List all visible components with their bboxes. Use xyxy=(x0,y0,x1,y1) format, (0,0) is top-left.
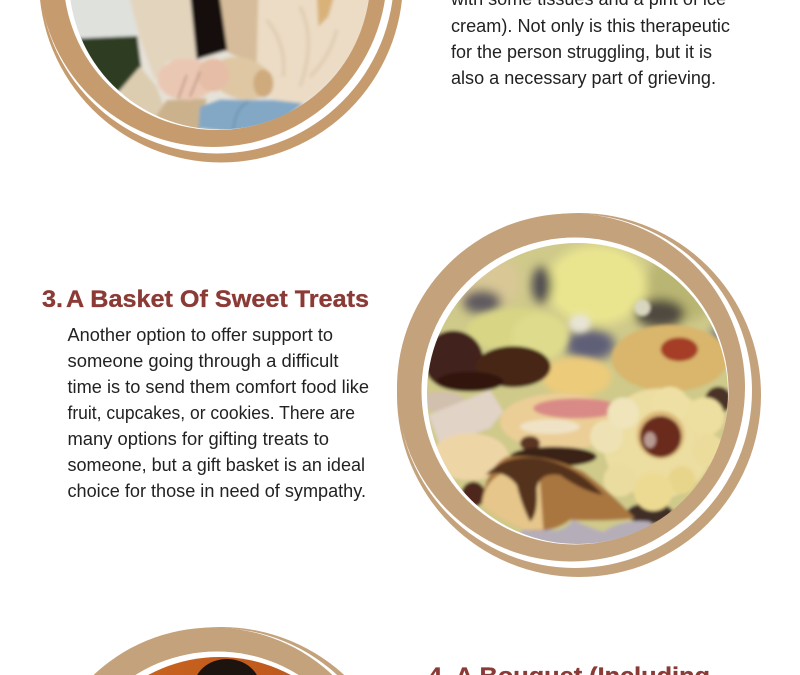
inner white rim xyxy=(64,0,370,130)
text block: section 3 description: time is to send them comfort food like xyxy=(68,377,369,397)
outer crescent ring xyxy=(39,627,403,675)
text block: section 3 description: someone going through a difficult xyxy=(68,351,338,371)
text block: section 2 closing lines: also a necessary part of grieving. xyxy=(451,68,716,88)
text block: section 2 closing lines: cream). Not only is this therapeutic xyxy=(451,16,730,36)
plate edge xyxy=(520,518,654,544)
inner white rim xyxy=(64,652,370,675)
photo: two people holding hands xyxy=(70,0,368,130)
text block: section 3 description xyxy=(68,325,369,501)
flower shaped linzer cookie xyxy=(590,387,724,511)
white gap ring xyxy=(398,214,752,568)
text block: section 3 description: fruit, cupcakes, or cookies. There are xyxy=(68,403,355,423)
inner white rim xyxy=(422,238,728,544)
panel: section 4 bouquet photo circle xyxy=(94,627,344,675)
text block: section 3 description: Another option to offer support to xyxy=(68,325,333,345)
chocolate cake slice xyxy=(482,456,635,531)
white gap ring xyxy=(40,628,394,675)
main tan ring xyxy=(397,214,745,562)
text block: section 2 closing lines xyxy=(450,0,730,88)
main tan ring xyxy=(39,0,387,147)
photo: person on orange background xyxy=(148,657,291,675)
text block: section 3 description: choice for those in need of sympathy. xyxy=(68,481,366,501)
outer crescent ring xyxy=(397,213,761,577)
main tan ring xyxy=(39,628,387,675)
panel: section 3 cookie photo circle xyxy=(397,213,761,577)
heading: 3. A Basket Of Sweet Treats: A Basket Of Sweet Treats xyxy=(66,286,369,313)
photo: assorted cookies xyxy=(427,243,728,544)
white gap ring xyxy=(40,0,394,154)
text block: section 3 description: someone, but a gift basket is an ideal xyxy=(68,455,365,475)
outer crescent ring xyxy=(39,0,403,162)
text block: section 3 description: many options for gifting treats to xyxy=(68,429,329,449)
panel: section 2 comforting photo circle xyxy=(39,0,403,167)
text block: section 2 closing lines: for the person struggling, but it is xyxy=(451,42,712,62)
heading: 3. A Basket Of Sweet Treats: 3. xyxy=(42,286,63,313)
